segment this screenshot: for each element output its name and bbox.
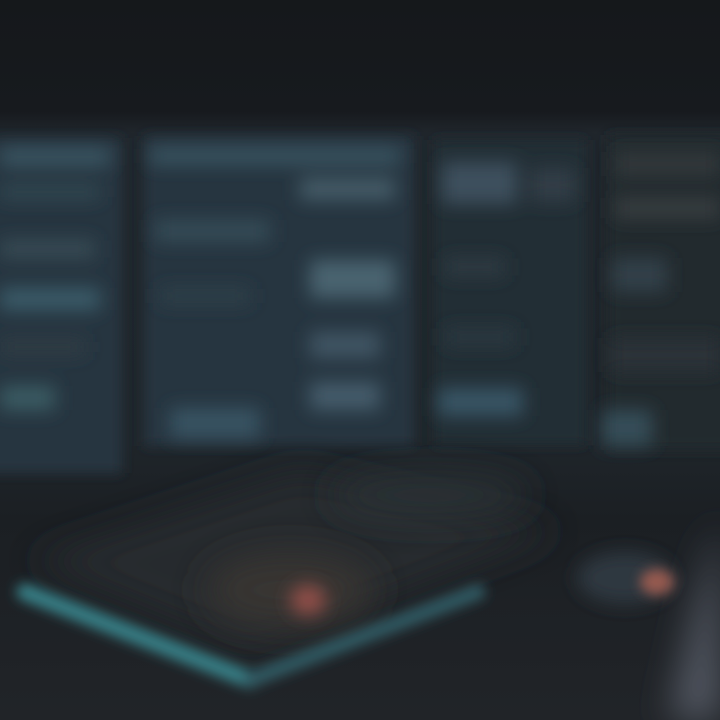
panel: centre right	[434, 140, 586, 445]
blurred screen content	[0, 148, 720, 446]
centre panel rows	[150, 148, 400, 438]
panel: far right	[608, 135, 720, 450]
far right panel rows	[602, 152, 720, 446]
red glow: keyboard	[290, 585, 326, 615]
left panel rows	[0, 148, 110, 410]
keyboard and desk area	[30, 470, 560, 650]
panel: far left	[0, 138, 122, 473]
light corner at bottom right	[670, 520, 720, 720]
upper keyboard glow	[330, 473, 530, 517]
centre right panel rows	[438, 162, 575, 416]
warm glow on keyboard	[205, 552, 375, 628]
monitor panels	[0, 135, 720, 473]
red glow: mouse	[640, 569, 674, 595]
panel: centre	[144, 136, 414, 446]
teal V-shaped light strip	[25, 592, 478, 680]
mouse	[577, 552, 673, 604]
keyboard	[30, 470, 560, 650]
